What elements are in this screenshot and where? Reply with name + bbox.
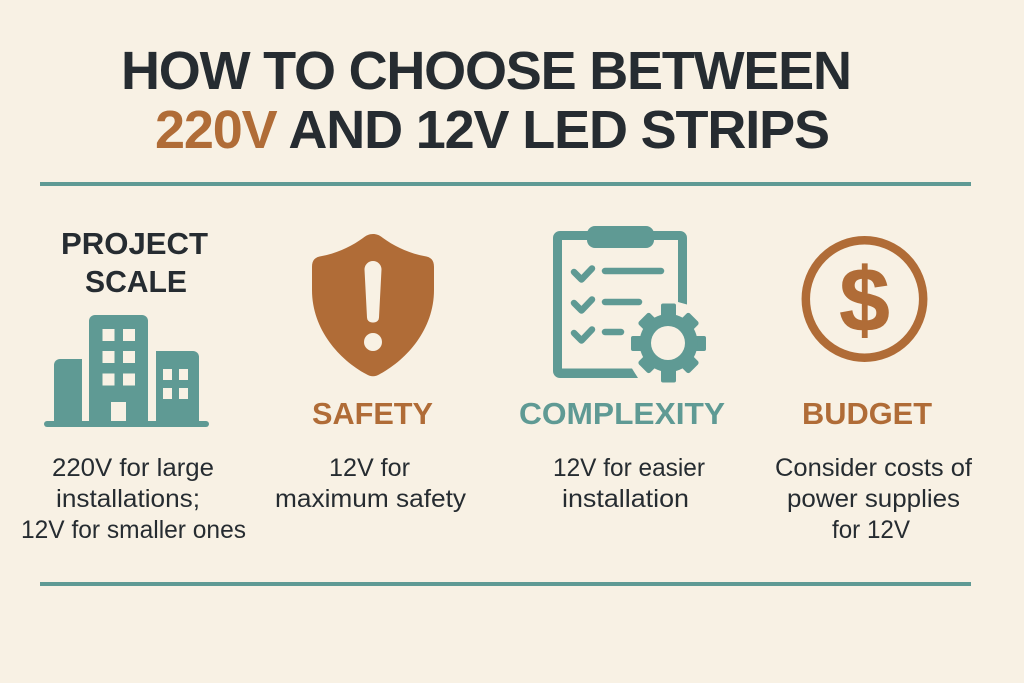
heading: budget: BUDGET [802, 396, 932, 431]
text: complexity: installation [562, 485, 689, 513]
text: project scale: 220V for large [52, 454, 214, 482]
text: project scale [21, 454, 246, 544]
title [121, 41, 852, 160]
panel: complexity [519, 226, 725, 513]
icon: buildings [44, 315, 209, 427]
title: 220V AND 12V LED STRIPS [155, 100, 830, 160]
text: project scale: 12V for smaller ones [21, 516, 246, 544]
panel: budget [775, 240, 972, 544]
text: safety: maximum safety [275, 485, 467, 513]
panel: project scale [21, 226, 246, 544]
heading: complexity: COMPLEXITY [519, 396, 725, 431]
icon: clipboard and gear [553, 226, 706, 382]
text: budget: power supplies [787, 485, 960, 513]
title: HOW TO CHOOSE BETWEEN [121, 41, 852, 101]
text: budget: for 12V [832, 516, 910, 544]
icon: shield [312, 234, 434, 376]
text: complexity [553, 454, 705, 513]
icon: dollar coin [806, 240, 923, 358]
text: project scale: installations; [56, 485, 200, 513]
panel: safety [275, 234, 467, 513]
heading: project scale [61, 226, 208, 299]
heading: project scale: SCALE [85, 264, 187, 299]
text: complexity: 12V for easier [553, 454, 705, 482]
heading: safety: SAFETY [312, 396, 433, 431]
text: budget: Consider costs of [775, 454, 972, 482]
text: safety: 12V for [329, 454, 410, 482]
text: budget [775, 454, 972, 544]
text: safety [275, 454, 467, 513]
icon: dollar coin: $ [839, 251, 890, 351]
heading: project scale: PROJECT [61, 226, 208, 261]
